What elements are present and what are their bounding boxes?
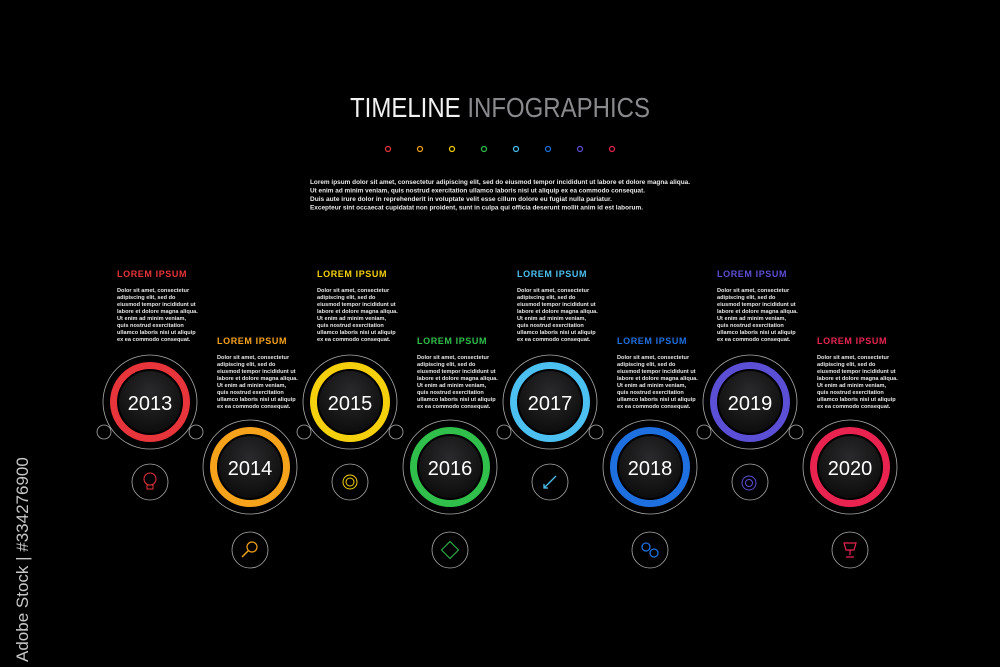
milestone 2019: ex ea commodo consequat.	[717, 337, 791, 343]
milestone 2018	[603, 336, 698, 568]
colored dots row	[386, 146, 614, 152]
milestone 2017: quis nostrud exercitation	[517, 323, 584, 329]
milestone 2015	[297, 269, 403, 500]
milestone 2016: LOREM IPSUM	[417, 336, 487, 346]
milestone 2019: Ut enim ad minim veniam,	[717, 316, 786, 322]
milestone 2018: ullamco laboris nisi ut aliquip	[617, 397, 696, 403]
milestone 2018: 2018	[628, 458, 672, 480]
title: TIMELINE INFOGRAPHICS	[350, 92, 650, 123]
milestone 2015: quis nostrud exercitation	[317, 323, 384, 329]
milestone 2017: eiusmod tempor incididunt ut	[517, 302, 596, 308]
milestone 2020: quis nostrud exercitation	[817, 390, 884, 396]
milestone 2020: eiusmod tempor incididunt ut	[817, 369, 896, 375]
milestone 2016: 2016	[428, 458, 472, 480]
milestone 2017: LOREM IPSUM	[517, 269, 587, 279]
milestone 2020: LOREM IPSUM	[817, 336, 887, 346]
milestone 2015: LOREM IPSUM	[317, 269, 387, 279]
watermark side text: Adobe Stock | #334276900	[13, 457, 32, 662]
milestone 2016: quis nostrud exercitation	[417, 390, 484, 396]
milestone 2014: 2014	[228, 458, 272, 480]
milestone 2015: labore et dolore magna aliqua.	[317, 309, 398, 315]
milestone 2015: eiusmod tempor incididunt ut	[317, 302, 396, 308]
milestone 2016: Ut enim ad minim veniam,	[417, 383, 486, 389]
milestone 2014	[203, 336, 298, 568]
milestone 2016: labore et dolore magna aliqua.	[417, 376, 498, 382]
milestone 2013: Ut enim ad minim veniam,	[117, 316, 186, 322]
milestone 2013: eiusmod tempor incididunt ut	[117, 302, 196, 308]
milestone 2014: labore et dolore magna aliqua.	[217, 376, 298, 382]
milestone 2019: adipiscing elit, sed do	[717, 295, 776, 301]
intro text: Duis aute irure dolor in reprehenderit in voluptate velit esse cillum dolore eu fugiat nulla pariatur.	[310, 196, 612, 203]
milestone 2018: Ut enim ad minim veniam,	[617, 383, 686, 389]
milestone 2019: Dolor sit amet, consectetur	[717, 288, 790, 294]
milestone 2013: quis nostrud exercitation	[117, 323, 184, 329]
milestone 2016: ex ea commodo consequat.	[417, 404, 491, 410]
milestone 2020: Dolor sit amet, consectetur	[817, 355, 890, 361]
milestone 2017: adipiscing elit, sed do	[517, 295, 576, 301]
milestone 2013: ex ea commodo consequat.	[117, 337, 191, 343]
milestone 2020: Ut enim ad minim veniam,	[817, 383, 886, 389]
milestone 2017: 2017	[528, 393, 572, 415]
milestone 2019: 2019	[728, 393, 772, 415]
milestone 2019	[697, 269, 803, 500]
milestone 2016: adipiscing elit, sed do	[417, 362, 476, 368]
milestone 2018: quis nostrud exercitation	[617, 390, 684, 396]
milestone 2013: labore et dolore magna aliqua.	[117, 309, 198, 315]
milestone 2017: Ut enim ad minim veniam,	[517, 316, 586, 322]
milestone 2018: Dolor sit amet, consectetur	[617, 355, 690, 361]
milestone 2014: ex ea commodo consequat.	[217, 404, 291, 410]
milestone 2016: ullamco laboris nisi ut aliquip	[417, 397, 496, 403]
milestone 2014: eiusmod tempor incididunt ut	[217, 369, 296, 375]
milestone 2013: adipiscing elit, sed do	[117, 295, 176, 301]
intro text	[310, 179, 690, 212]
milestone 2015: 2015	[328, 393, 372, 415]
intro text: Ut enim ad minim veniam, quis nostrud exercitation ullamco laboris nisi ut aliquip ex ea commodo consequat.	[310, 188, 645, 194]
milestone 2017: Dolor sit amet, consectetur	[517, 288, 590, 294]
milestone 2018: ex ea commodo consequat.	[617, 404, 691, 410]
milestone 2013: Dolor sit amet, consectetur	[117, 288, 190, 294]
milestone 2019: LOREM IPSUM	[717, 269, 787, 279]
milestone 2020: adipiscing elit, sed do	[817, 362, 876, 368]
milestone 2013: LOREM IPSUM	[117, 269, 187, 279]
milestone 2017: ullamco laboris nisi ut aliquip	[517, 330, 596, 336]
milestone 2014: LOREM IPSUM	[217, 336, 287, 346]
milestone 2016	[403, 336, 498, 568]
intro text: Excepteur sint occaecat cupidatat non proident, sunt in culpa qui officia deserunt mollit anim id est laborum.	[310, 204, 643, 212]
milestone 2019: labore et dolore magna aliqua.	[717, 309, 798, 315]
milestone 2015: adipiscing elit, sed do	[317, 295, 376, 301]
milestone 2019: ullamco laboris nisi ut aliquip	[717, 330, 796, 336]
milestone 2018: adipiscing elit, sed do	[617, 362, 676, 368]
milestone 2014: quis nostrud exercitation	[217, 390, 284, 396]
milestone 2015: Dolor sit amet, consectetur	[317, 288, 390, 294]
milestone 2019: eiusmod tempor incididunt ut	[717, 302, 796, 308]
milestone 2016: eiusmod tempor incididunt ut	[417, 369, 496, 375]
milestone 2017	[497, 269, 603, 500]
milestone 2020: ullamco laboris nisi ut aliquip	[817, 397, 896, 403]
milestone 2018: LOREM IPSUM	[617, 336, 687, 346]
milestone 2018: labore et dolore magna aliqua.	[617, 376, 698, 382]
milestone 2020	[803, 336, 898, 568]
milestone 2020: ex ea commodo consequat.	[817, 404, 891, 410]
milestone 2013: 2013	[128, 393, 172, 415]
milestone 2018: eiusmod tempor incididunt ut	[617, 369, 696, 375]
milestone 2015: ullamco laboris nisi ut aliquip	[317, 330, 396, 336]
intro text: Lorem ipsum dolor sit amet, consectetur adipiscing elit, sed do eiusmod tempor incididunt ut labore et dolore magna aliqua.	[310, 179, 690, 186]
milestone 2019: quis nostrud exercitation	[717, 323, 784, 329]
milestone 2014: adipiscing elit, sed do	[217, 362, 276, 368]
milestone 2017: ex ea commodo consequat.	[517, 337, 591, 343]
milestone 2015: ex ea commodo consequat.	[317, 337, 391, 343]
milestone 2015: Ut enim ad minim veniam,	[317, 316, 386, 322]
milestone 2020: 2020	[828, 458, 872, 480]
milestone 2016: Dolor sit amet, consectetur	[417, 355, 490, 361]
milestone 2020: labore et dolore magna aliqua.	[817, 376, 898, 382]
milestone 2013: ullamco laboris nisi ut aliquip	[117, 330, 196, 336]
milestone 2014: Ut enim ad minim veniam,	[217, 383, 286, 389]
milestone 2014: Dolor sit amet, consectetur	[217, 355, 290, 361]
milestone 2014: ullamco laboris nisi ut aliquip	[217, 397, 296, 403]
milestone 2013	[97, 269, 203, 500]
milestone 2017: labore et dolore magna aliqua.	[517, 309, 598, 315]
